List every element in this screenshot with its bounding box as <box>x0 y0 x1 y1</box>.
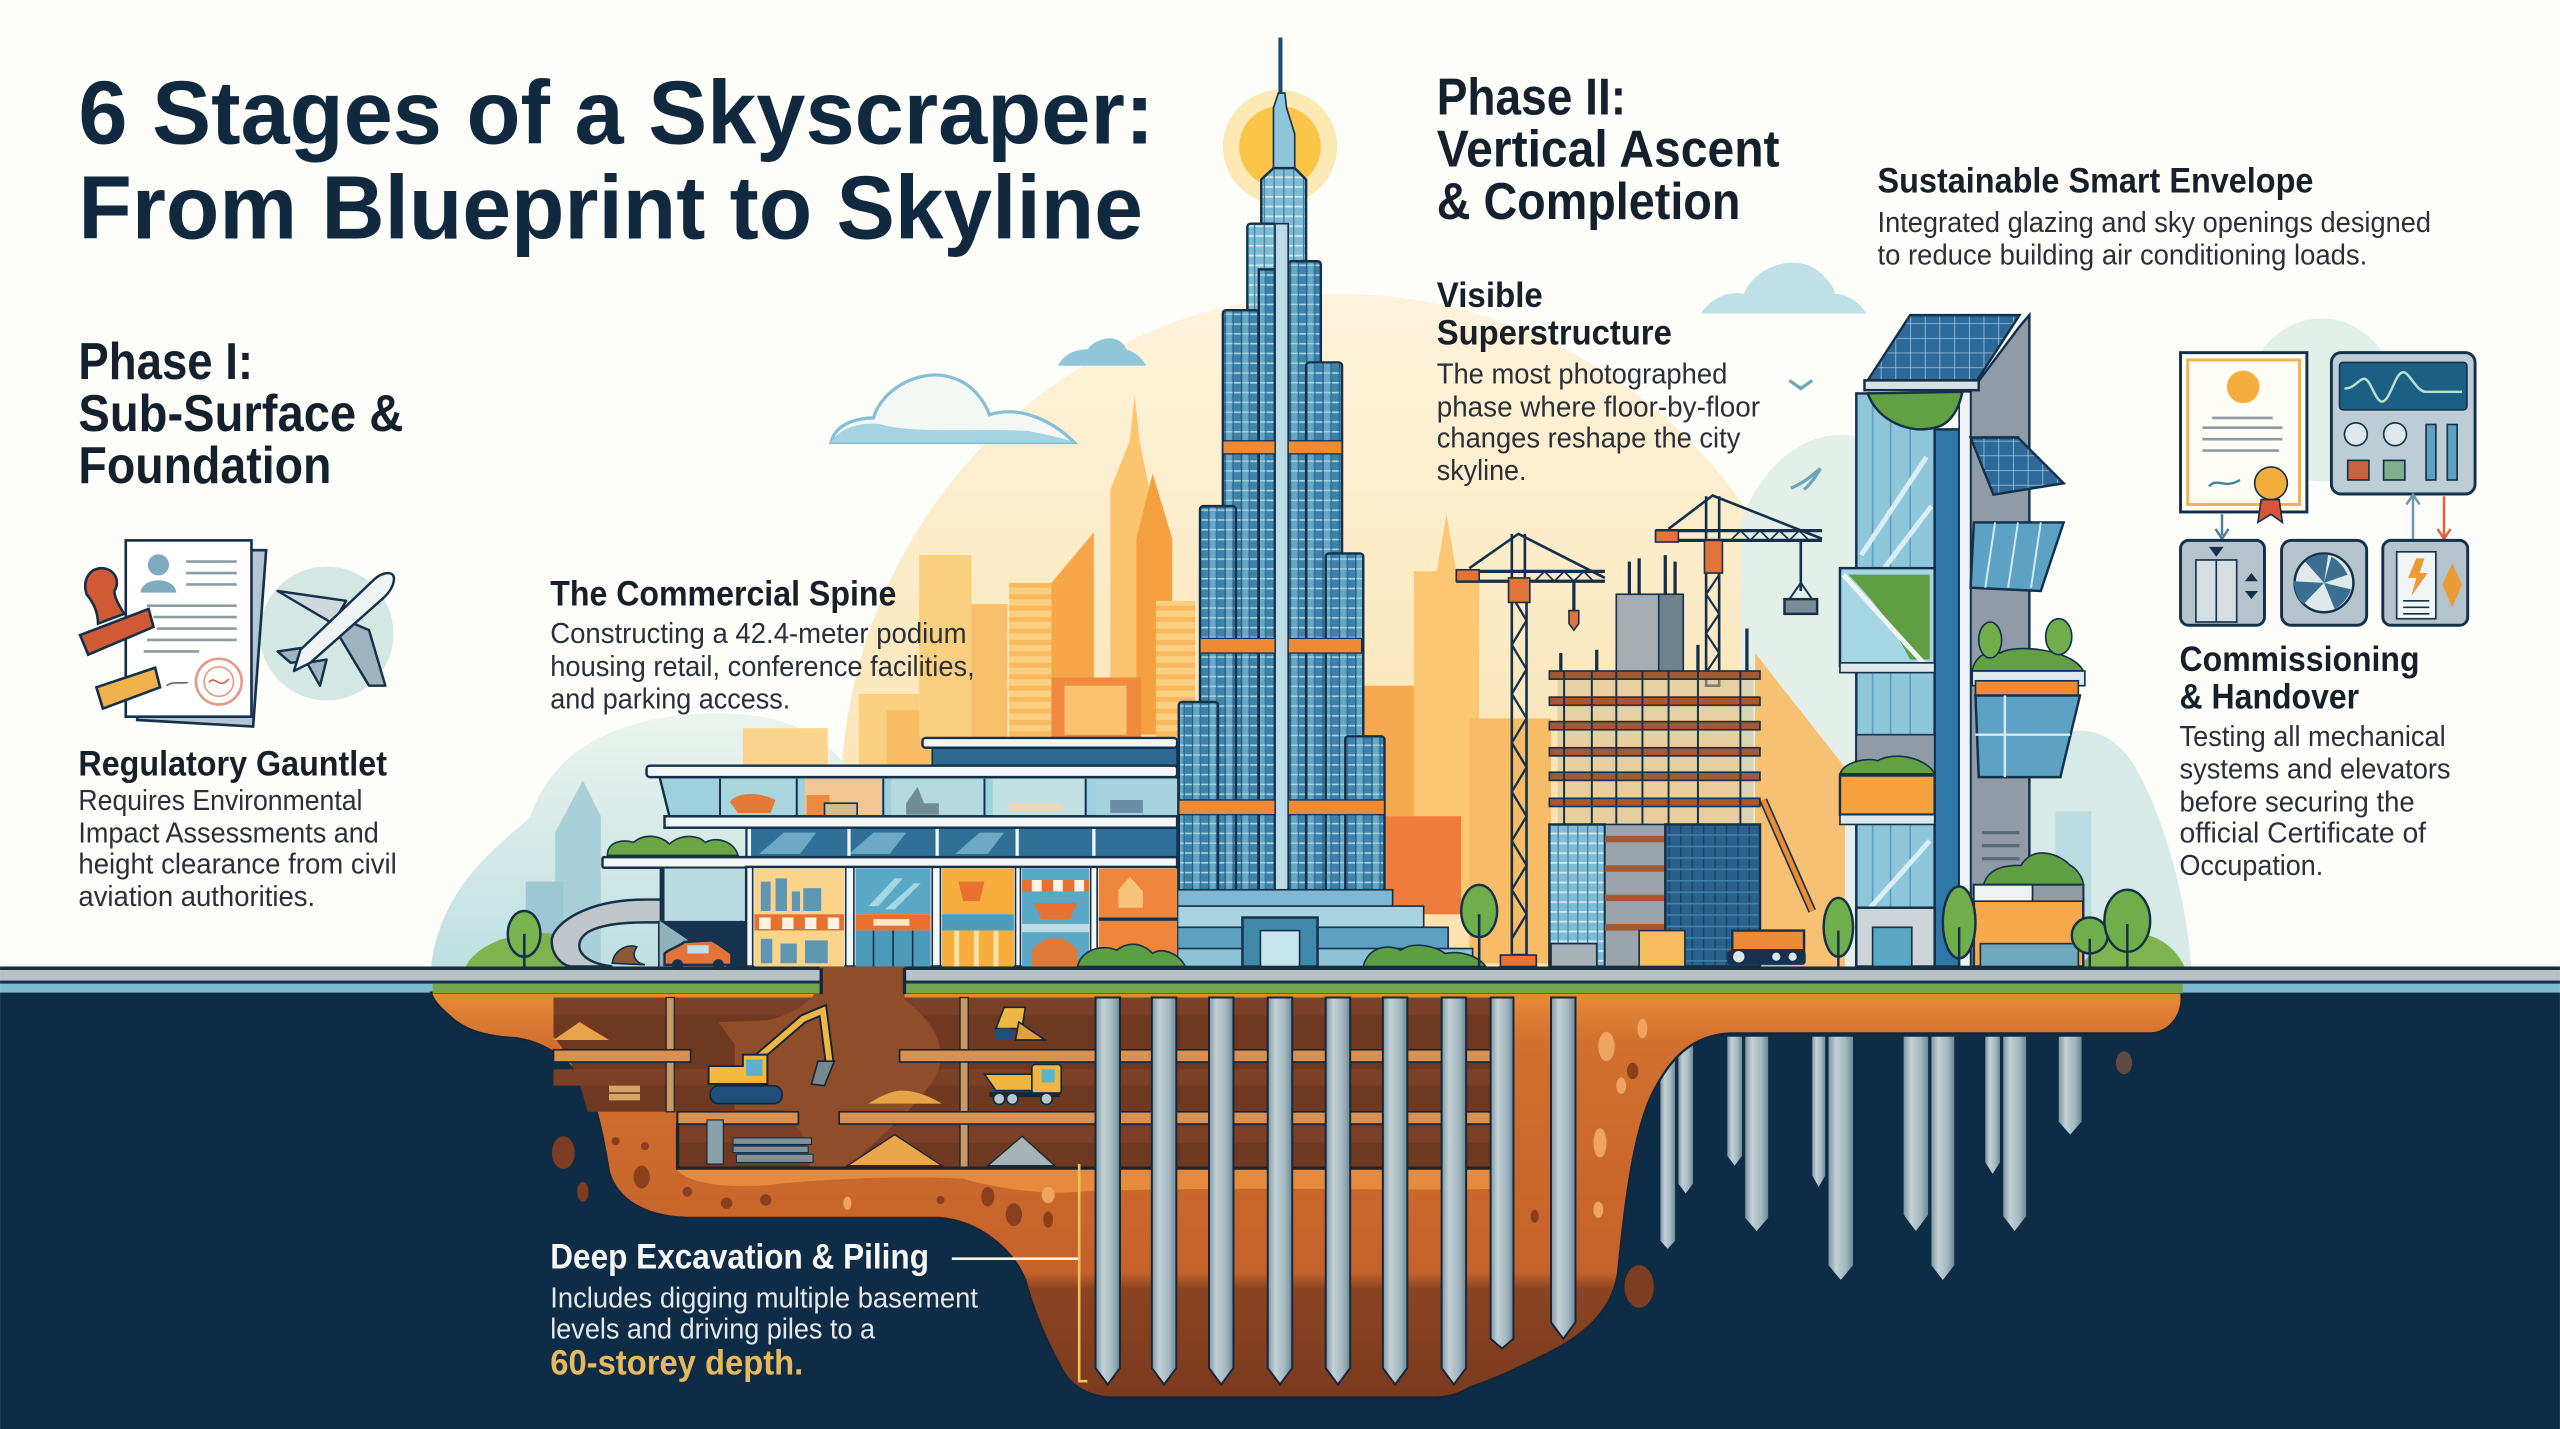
heading: Phase I <box>78 333 403 495</box>
text: Commissioning & Handover: & Handover <box>2180 678 2359 717</box>
concrete core <box>1616 594 1659 676</box>
main tower <box>1081 38 1473 966</box>
timber stack <box>609 1086 640 1100</box>
text: The Commercial Spine: housing retail, conference facilities, <box>550 651 975 683</box>
text: Deep Excavation & Piling: Includes digging multiple basement <box>550 1283 978 1315</box>
cloud small <box>1058 338 1146 366</box>
text: The Commercial Spine: and parking access. <box>550 684 790 716</box>
tree <box>1461 885 1497 966</box>
scaffold floors <box>1558 676 1753 824</box>
heading: Phase II: Vertical Ascent <box>1437 121 1780 179</box>
excavator <box>709 1011 834 1104</box>
underground navy <box>0 993 2560 1429</box>
posts <box>666 998 674 1112</box>
grey spandrel <box>1856 735 1935 775</box>
heading: Phase II <box>1437 68 1780 231</box>
text: Regulatory Gauntlet: Requires Environmental <box>78 785 362 817</box>
cloud right <box>1701 263 1866 313</box>
text: The Commercial Spine: Constructing a 42.4-meter podium <box>550 618 967 650</box>
shaft <box>718 966 941 1167</box>
sand piles <box>554 1022 609 1040</box>
shopping podium <box>508 738 1177 970</box>
hanging piles <box>1660 1037 2082 1280</box>
base <box>1856 908 1935 966</box>
fan box <box>2282 540 2367 625</box>
glass floor <box>660 777 1177 816</box>
spire <box>1278 38 1282 103</box>
angled balcony <box>1971 522 2064 591</box>
text: Sustainable Smart Envelope: Integrated glazing and sky openings designed <box>1878 207 2431 239</box>
heading: Phase I: Foundation <box>78 437 331 495</box>
text: Deep Excavation & Piling: 60-storey depth. <box>550 1344 803 1383</box>
sun <box>1223 90 1337 204</box>
arrows <box>2215 495 2451 539</box>
hanging bay <box>1972 671 2085 686</box>
text: Visible Superstructure: skyline. <box>1437 455 1527 487</box>
trees <box>1824 886 2150 966</box>
central core <box>1275 224 1288 906</box>
power box <box>2383 540 2468 625</box>
lower glazing <box>1549 824 1605 966</box>
skyline silhouettes <box>743 395 1845 966</box>
shop 1 <box>754 869 844 914</box>
navy stones <box>552 1051 2132 1308</box>
boom lift <box>1763 800 1812 911</box>
ramp vehicle <box>612 946 645 965</box>
bricks and ladder <box>733 1138 813 1162</box>
solar roof <box>1868 315 2020 380</box>
cloud left <box>831 375 1074 442</box>
text: Deep Excavation & Piling: levels and driving piles to a <box>550 1314 875 1346</box>
icon: commissioning panel <box>2181 318 2475 625</box>
title: 6 Stages of a Skyscraper: <box>78 64 1154 164</box>
text: Visible Superstructure: The most photographed <box>1437 359 1727 391</box>
ground road and strip <box>0 966 2560 993</box>
text: Commissioning & Handover <box>2180 640 2451 882</box>
soil stones <box>611 1063 1638 1228</box>
text: Commissioning & Handover: Commissioning <box>2180 640 2420 679</box>
callout leader <box>952 1164 1087 1381</box>
shop 4 <box>1022 869 1089 966</box>
terrace bushes <box>607 836 738 855</box>
text: Sustainable Smart Envelope: to reduce building air conditioning loads. <box>1878 239 2367 271</box>
text: Deep Excavation & Piling <box>550 1238 978 1383</box>
text: Regulatory Gauntlet: height clearance from civil <box>78 848 397 880</box>
green glass bay <box>1840 568 1935 666</box>
crane 1 <box>1456 534 1605 955</box>
icon: airplane <box>278 573 394 686</box>
base steps <box>1161 890 1393 908</box>
text: Sustainable Smart Envelope: Sustainable Smart Envelope <box>1878 162 2313 201</box>
text: Commissioning & Handover: systems and elevators <box>2180 754 2451 786</box>
soil mass <box>431 993 2182 1397</box>
text: Regulatory Gauntlet <box>78 744 397 913</box>
background haze and hills <box>431 294 2191 1306</box>
text: Visible Superstructure: changes reshape the city <box>1437 422 1741 454</box>
certificate <box>2181 353 2307 522</box>
bushes around tower <box>1078 944 1486 966</box>
text: Regulatory Gauntlet: aviation authorities. <box>78 881 315 913</box>
shop 5 <box>1099 869 1177 966</box>
text: Sustainable Smart Envelope <box>1878 162 2431 271</box>
sustainable tower <box>1824 315 2150 966</box>
text: Commissioning & Handover: Testing all mechanical <box>2180 721 2446 753</box>
excavation levels <box>433 966 2183 1170</box>
shop 2 <box>856 869 931 914</box>
main glazing <box>1856 393 1935 966</box>
grey rear core <box>1971 315 2029 966</box>
shop 3 <box>942 869 1014 914</box>
text: Commissioning & Handover: Occupation. <box>2180 850 2323 882</box>
text: Visible Superstructure: Superstructure <box>1437 313 1672 352</box>
control panel <box>2331 353 2475 494</box>
construction site <box>1456 495 1822 966</box>
bulldozer <box>994 1007 1045 1040</box>
text: Regulatory Gauntlet: Regulatory Gauntlet <box>78 744 387 783</box>
terrace garden <box>1972 649 2083 671</box>
heading: Phase I: Sub-Surface & <box>78 385 403 443</box>
text: The Commercial Spine: The Commercial Spine <box>550 575 896 614</box>
entrance <box>1242 918 1318 966</box>
birds <box>1789 380 1820 490</box>
side solar panel <box>1971 438 2064 495</box>
crane 2 <box>1655 495 1822 686</box>
text: Regulatory Gauntlet: Impact Assessments and <box>78 817 379 849</box>
car <box>665 940 731 965</box>
dump truck <box>985 1064 1061 1104</box>
heading: Phase II: & Completion <box>1437 173 1740 231</box>
text: Visible Superstructure <box>1437 276 1760 487</box>
soil light band <box>676 1169 1510 1193</box>
roof garden <box>1868 392 1962 429</box>
dark glass floor <box>746 828 1177 857</box>
title: From Blueprint to Skyline <box>78 158 1143 258</box>
base shop <box>1984 853 2083 885</box>
tree <box>508 911 540 957</box>
shops <box>746 867 1177 966</box>
text: The Commercial Spine <box>550 575 975 716</box>
elevator box <box>2181 540 2264 625</box>
text: Commissioning & Handover: official Certificate of <box>2180 817 2426 849</box>
road edge and green strip <box>433 984 820 993</box>
icon: permit documents and stamp <box>80 540 394 726</box>
text: Visible Superstructure: Visible <box>1437 276 1543 315</box>
slabs <box>554 1050 1510 1124</box>
text: Deep Excavation & Piling: Deep Excavation & Piling <box>550 1238 929 1277</box>
title <box>78 64 1154 258</box>
foundation piles <box>1096 998 1575 1384</box>
heading: Phase I: Phase I: <box>78 333 253 391</box>
ramp <box>552 900 741 966</box>
text: Visible Superstructure: phase where floor-by-floor <box>1437 391 1760 423</box>
upper roof <box>932 748 1177 766</box>
orange bands <box>1179 441 1384 815</box>
text: Commissioning & Handover: before securing the <box>2180 786 2415 818</box>
heading: Phase II: Phase II: <box>1437 68 1626 126</box>
planter <box>1840 756 1935 774</box>
